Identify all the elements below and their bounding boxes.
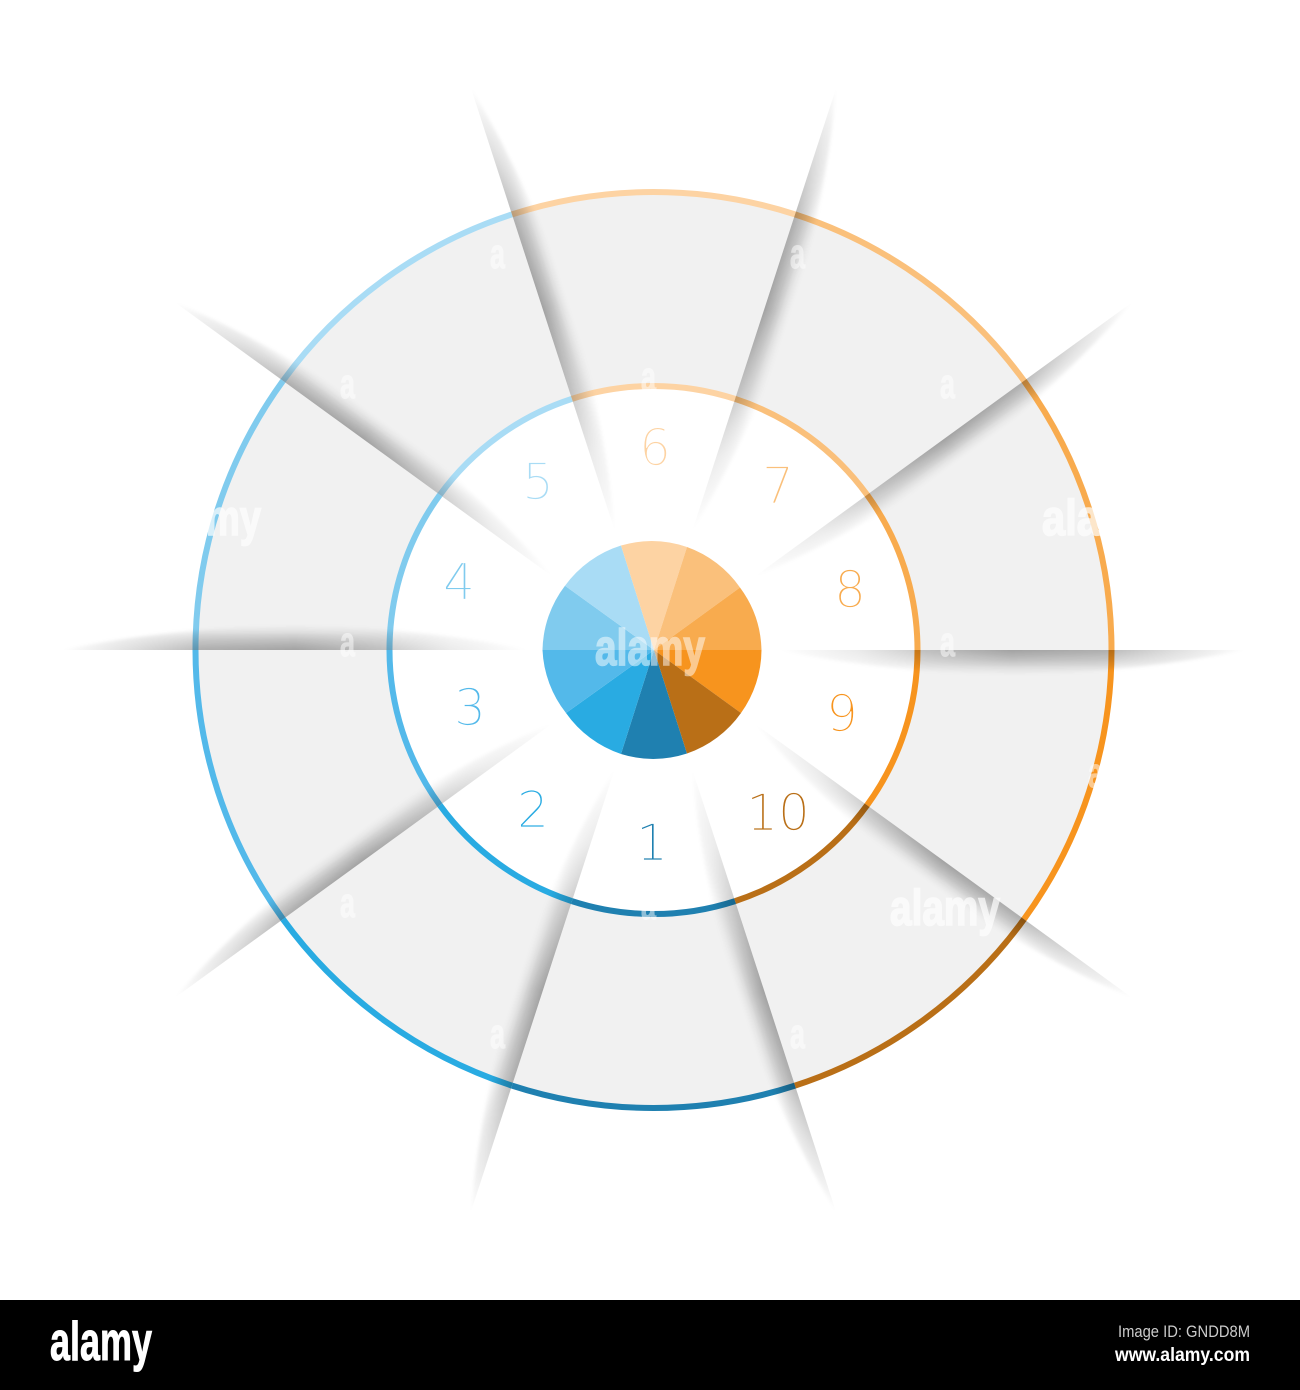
watermark overlays: ala xyxy=(1042,490,1101,546)
sector numbers: 2 xyxy=(517,781,549,839)
footer logo: alamy xyxy=(50,1310,152,1372)
watermark overlays: a xyxy=(940,618,955,665)
sector numbers xyxy=(443,419,866,872)
inner ring coloured arcs xyxy=(390,386,918,914)
watermark overlays: a xyxy=(940,360,955,407)
watermark overlays: a xyxy=(340,360,355,407)
watermark overlays: a xyxy=(490,230,505,277)
footer bar xyxy=(0,1300,1300,1390)
sector numbers: 7 xyxy=(762,457,794,515)
sector numbers: 5 xyxy=(522,453,554,511)
watermark overlays: a xyxy=(641,881,656,928)
sector numbers: 10 xyxy=(746,784,810,842)
watermark overlays: alamy xyxy=(595,619,705,676)
watermark overlays: a xyxy=(1088,749,1103,796)
watermark overlays: a xyxy=(790,230,805,277)
watermark overlays: my xyxy=(206,490,261,546)
central pie hub xyxy=(542,541,762,759)
white inner disc xyxy=(390,386,918,914)
sector numbers: 9 xyxy=(826,685,858,743)
outer ring coloured arcs xyxy=(196,192,1112,1108)
sector numbers: 1 xyxy=(636,814,668,872)
website: www.alamy.com xyxy=(1114,1345,1250,1366)
sector numbers: 4 xyxy=(443,553,475,611)
watermark overlays: a xyxy=(790,1010,805,1057)
sector numbers: 8 xyxy=(834,561,866,619)
radial fold shadows xyxy=(62,79,1245,1221)
image id: Image ID: GNDD8M xyxy=(1118,1322,1250,1341)
watermark overlays: a xyxy=(490,1010,505,1057)
grey outer ring panel xyxy=(196,192,1112,1108)
sector numbers: 6 xyxy=(639,419,671,477)
watermark overlays: alamy xyxy=(890,880,1000,936)
watermark overlays: a xyxy=(641,353,656,400)
watermark overlays: a xyxy=(340,879,355,926)
watermark overlays: a xyxy=(340,618,355,665)
watermark overlays xyxy=(206,230,1103,1057)
sector numbers: 3 xyxy=(454,679,486,737)
